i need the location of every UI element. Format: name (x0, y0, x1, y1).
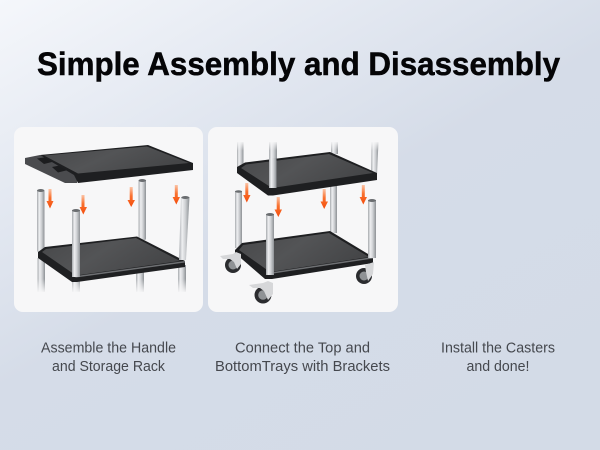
red arrows (243, 183, 367, 217)
panel: step 2 top and bottom trays (208, 127, 398, 312)
panel: step 1 handle and storage rack (14, 127, 203, 312)
top tray with handle (25, 145, 193, 183)
caption: step 3: Install the Casters (441, 340, 555, 356)
caster: rear left (220, 252, 241, 273)
lower tray (38, 236, 185, 282)
caption: step 2 (215, 340, 390, 375)
front poles (72, 196, 190, 277)
caption: step 1: and Storage Rack (52, 359, 166, 375)
front lower poles (266, 199, 376, 275)
top tray (237, 152, 377, 196)
bottom tray (235, 231, 373, 279)
caption: step 1 (41, 340, 176, 375)
upper poles above top tray (234, 141, 382, 190)
caster: front left (249, 281, 273, 304)
caption: step 1: Assemble the Handle (41, 340, 176, 356)
caption: step 3 (441, 340, 555, 375)
rear poles (37, 179, 146, 252)
title: Simple Assembly and Disassembly (37, 46, 560, 82)
caster: right (356, 262, 374, 284)
caption: step 2: BottomTrays with Brackets (215, 359, 390, 375)
caption: step 2: Connect the Top and (235, 340, 370, 356)
caption: step 3: and done! (466, 359, 530, 375)
red arrows (46, 185, 180, 214)
rear lower poles (235, 186, 337, 248)
lower pole stubs (34, 258, 189, 293)
